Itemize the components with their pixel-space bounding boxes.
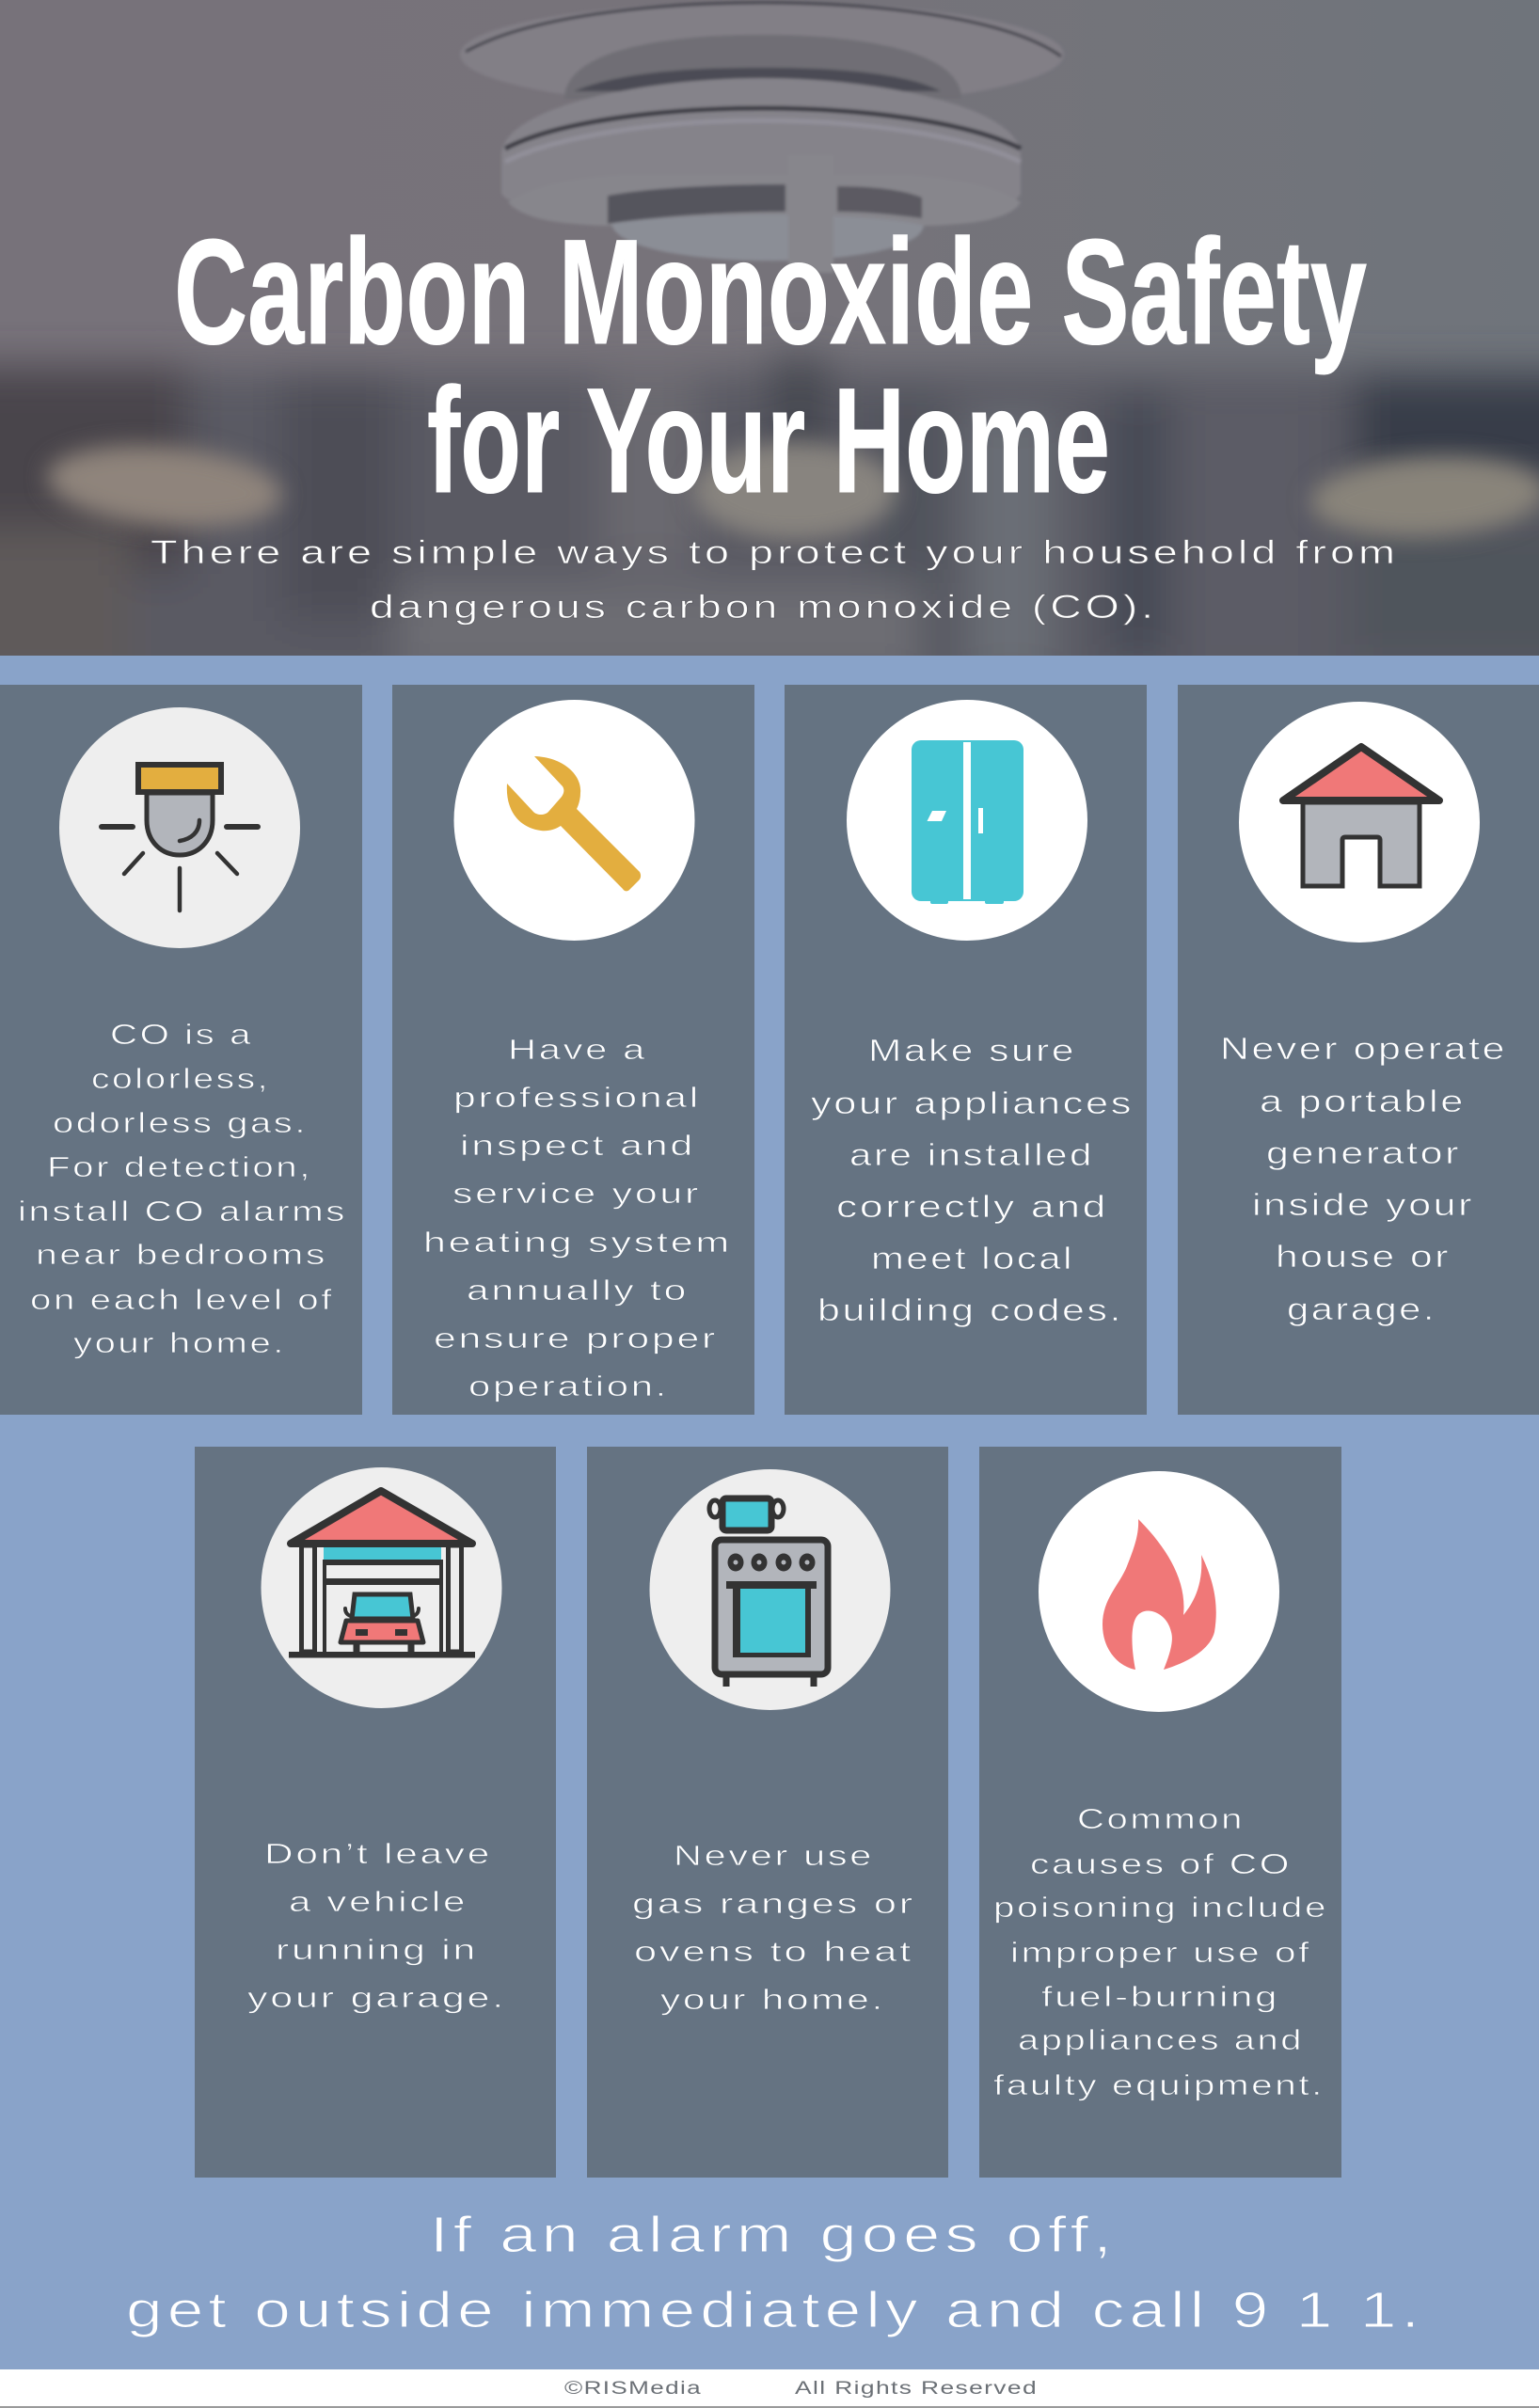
icon: garage and car	[262, 1467, 502, 1708]
panel: professional inspection	[392, 685, 754, 1415]
call to action	[126, 2207, 1424, 2338]
icon: alarm light	[59, 707, 300, 948]
text: your home.	[660, 1983, 885, 2016]
text: annually to	[467, 1274, 689, 1307]
text: ovens to heat	[634, 1935, 913, 1968]
text	[632, 1839, 915, 2016]
card background	[1178, 685, 1539, 1415]
icon: refrigerator	[847, 700, 1087, 941]
text	[247, 1837, 506, 2014]
text: gas ranges or	[632, 1887, 915, 1920]
text: causes of CO	[1030, 1847, 1292, 1880]
call to action: get outside immediately and call 9 1 1.	[126, 2282, 1424, 2338]
footer credits: ©RISMedia	[564, 2379, 702, 2399]
footer credits: All Rights Reserved	[795, 2379, 1038, 2399]
text: Don’t leave	[264, 1837, 492, 1870]
card background	[587, 1447, 948, 2178]
panel: generator	[1178, 685, 1539, 1415]
icon: stove and pot	[649, 1469, 890, 1710]
text: Common	[1077, 1802, 1245, 1835]
text: inside your	[1252, 1187, 1474, 1222]
text: building codes.	[817, 1292, 1123, 1327]
subtitle: There are simple ways to protect your household from	[151, 534, 1399, 571]
panel: appliances	[785, 685, 1147, 1415]
card background	[392, 685, 754, 1415]
text: Have a	[508, 1033, 647, 1066]
text: garage.	[1287, 1291, 1436, 1326]
text: your appliances	[811, 1085, 1134, 1120]
card background	[0, 685, 362, 1415]
text: install CO alarms	[18, 1195, 347, 1228]
text: appliances and	[1018, 2023, 1304, 2056]
text: faulty equipment.	[993, 2068, 1325, 2101]
icon: flame	[1039, 1471, 1279, 1712]
panel: vehicle in garage	[195, 1447, 556, 2178]
subtitle	[151, 534, 1399, 626]
text: operation.	[468, 1370, 669, 1402]
text: odorless gas.	[53, 1106, 308, 1139]
text: improper use of	[1010, 1936, 1311, 1969]
footer strip	[0, 2369, 1539, 2408]
text: inspect and	[460, 1129, 695, 1162]
text: are installed	[849, 1137, 1094, 1172]
title	[174, 208, 1367, 524]
text	[18, 1018, 347, 1359]
text: Never operate	[1220, 1031, 1507, 1066]
text: CO is a	[110, 1018, 253, 1051]
text	[1220, 1031, 1507, 1326]
card background	[979, 1447, 1341, 2178]
text	[993, 1802, 1328, 2101]
text: Never use	[674, 1839, 874, 1872]
text: For detection,	[47, 1150, 312, 1183]
text: a portable	[1260, 1084, 1466, 1118]
panel: CO alarm	[0, 685, 362, 1415]
subtitle: dangerous carbon monoxide (CO).	[370, 589, 1157, 626]
text: colorless,	[91, 1062, 270, 1095]
text: professional	[453, 1081, 701, 1114]
text: generator	[1266, 1135, 1461, 1170]
text: running in	[276, 1933, 478, 1966]
text: house or	[1276, 1239, 1451, 1274]
card background	[195, 1447, 556, 2178]
text: meet local	[871, 1241, 1074, 1275]
text: service your	[452, 1177, 701, 1210]
call to action: If an alarm goes off,	[430, 2207, 1117, 2263]
text: on each level of	[30, 1283, 334, 1316]
text: your home.	[73, 1326, 286, 1359]
text: your garage.	[247, 1981, 506, 2014]
panel: common causes	[979, 1447, 1341, 2178]
footer credits	[564, 2379, 1038, 2399]
text: near bedrooms	[36, 1238, 327, 1271]
text: Make sure	[868, 1033, 1076, 1068]
text: ensure proper	[434, 1322, 718, 1354]
text: fuel-burning	[1041, 1980, 1279, 2013]
panel: gas ranges	[587, 1447, 948, 2178]
text: heating system	[423, 1226, 732, 1259]
icon: wrench	[453, 700, 694, 941]
card background	[785, 685, 1147, 1415]
text: a vehicle	[289, 1885, 468, 1918]
icon: house	[1239, 702, 1480, 943]
title: for Your Home	[427, 356, 1110, 524]
text	[811, 1033, 1134, 1327]
text: poisoning include	[993, 1891, 1328, 1924]
text: correctly and	[836, 1189, 1108, 1224]
plate	[461, 3, 1064, 93]
text	[423, 1033, 732, 1402]
header photo: smoke alarm on ceiling	[0, 0, 1539, 710]
